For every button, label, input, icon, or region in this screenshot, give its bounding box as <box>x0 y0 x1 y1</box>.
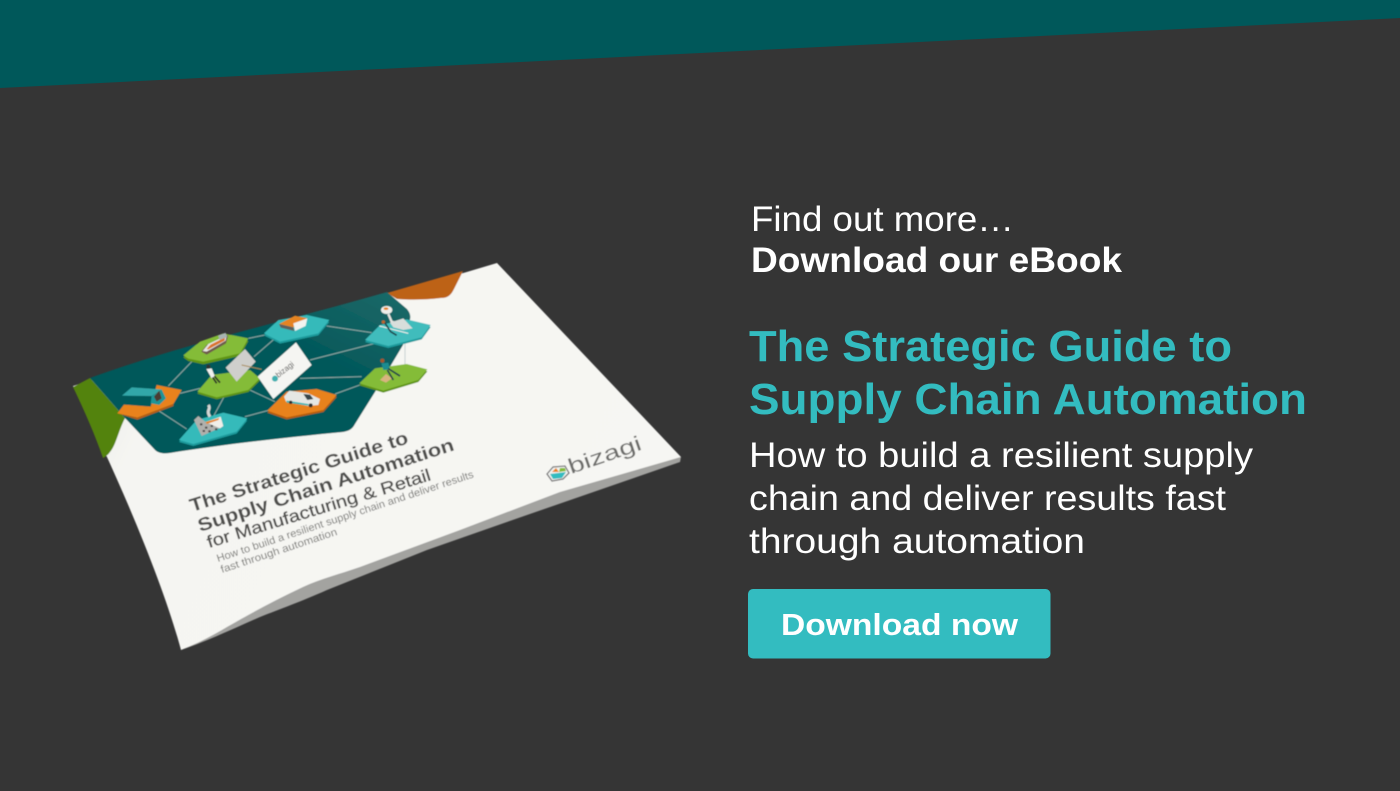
network connector lines <box>155 326 405 429</box>
subtitle line 1: How to build a resilient supply chain and deliver results <box>215 469 475 565</box>
icon: container ship <box>201 333 228 355</box>
booklet title line 3: for Manufacturing & Retail <box>205 466 433 552</box>
title line 1: The Strategic Guide to <box>187 427 411 516</box>
title line 2: Supply Chain Automation <box>195 434 456 536</box>
orange corner shape <box>387 271 463 300</box>
icon: robot arm and worker <box>379 306 413 335</box>
sign logo text: bizagi <box>274 360 296 380</box>
text block: call to action <box>749 200 1307 561</box>
booklet subtitle <box>215 469 475 576</box>
description line 2: chain and deliver results fast <box>749 479 1226 518</box>
hexagon: production line on teal <box>365 306 431 348</box>
description line 3: through automation <box>749 522 1085 561</box>
icon: grey board <box>226 349 256 382</box>
intro line: Find out more… <box>751 200 1014 239</box>
bizagi logo on cover <box>547 432 644 481</box>
teal cover panel <box>90 292 410 453</box>
description line 1: How to build a resilient supply <box>749 436 1254 475</box>
hexagon: ship on green <box>183 333 248 364</box>
icon: person standing <box>206 365 220 383</box>
hexagon: delivery van on orange <box>267 389 337 419</box>
download heading: Download our eBook <box>751 241 1123 280</box>
download button <box>748 589 1050 658</box>
hexagon: open container on orange <box>117 385 182 420</box>
logo wordmark: bizagi <box>565 432 644 479</box>
ebook title <box>749 322 1307 424</box>
booklet page edges <box>181 457 681 650</box>
ebook title line 2: Supply Chain Automation <box>749 375 1307 424</box>
icon: worker with box <box>380 359 400 383</box>
subtitle line 2: fast through automation <box>219 526 339 576</box>
icon: factory <box>194 405 223 436</box>
icon: open teal box <box>122 387 166 405</box>
hexagon: planner on green <box>197 349 262 399</box>
booklet cover <box>73 263 681 650</box>
ebook title line 1: The Strategic Guide to <box>749 322 1232 371</box>
icon: sign logo mark <box>272 376 278 382</box>
green corner shape <box>73 378 125 458</box>
booklet title <box>187 427 456 536</box>
hexagon: factory on teal <box>179 405 247 446</box>
hexagon: warehouse on teal <box>264 315 329 344</box>
ebook description <box>749 436 1254 561</box>
icon: delivery van <box>284 391 320 407</box>
icon: warehouse <box>279 316 307 331</box>
hexagon: person with parcels on green <box>359 359 427 393</box>
top teal angled band <box>0 0 1400 88</box>
icon: bizagi hexagon mark <box>547 466 569 481</box>
button label: Download now <box>781 607 1019 642</box>
booklet mockup <box>73 263 681 650</box>
supply chain network illustration <box>117 306 431 446</box>
bizagi sign card <box>258 342 312 399</box>
